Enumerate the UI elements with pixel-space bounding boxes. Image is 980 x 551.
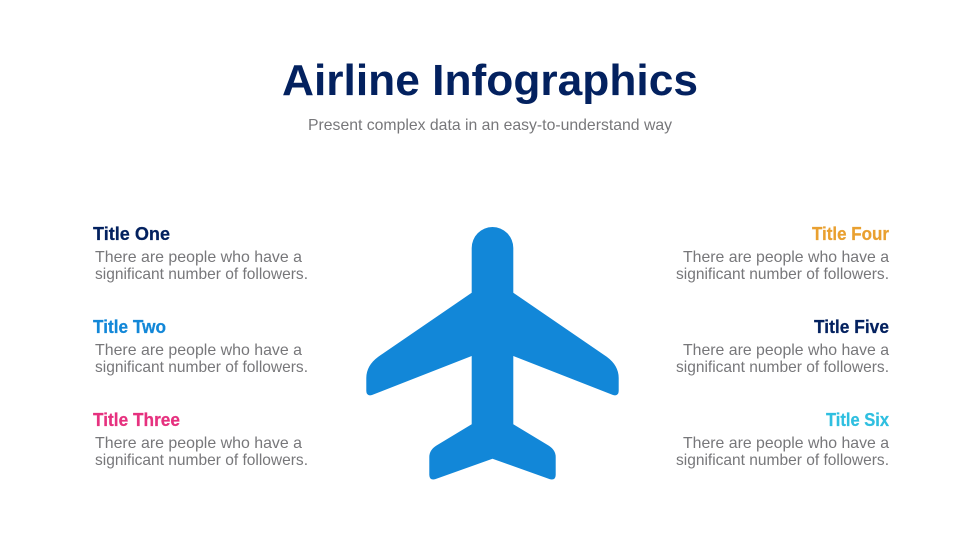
heading: title four: Title Four [812, 224, 889, 244]
text block: title three: significant number of followers. [95, 452, 308, 469]
panel: title two [93, 317, 308, 376]
text block: title two: There are people who have a [95, 342, 302, 359]
subtitle: Present complex data in an easy-to-understand way [308, 117, 672, 134]
title: Airline Infographics [282, 56, 698, 105]
panel: title one [93, 224, 308, 283]
text block: title six: There are people who have a [683, 435, 889, 452]
text block: title three [95, 435, 308, 469]
text block: title one: There are people who have a [95, 249, 302, 266]
panel: title four [676, 224, 889, 283]
heading: title five: Title Five [814, 317, 889, 337]
panel: title six [676, 410, 889, 469]
text block: title three: There are people who have a [95, 435, 302, 452]
panel: title three [93, 410, 308, 469]
heading: title six: Title Six [826, 410, 889, 430]
heading: title two: Title Two [93, 317, 166, 337]
heading: title three: Title Three [93, 410, 180, 430]
text block: title four [676, 249, 889, 283]
text block: title six [676, 435, 889, 469]
text block: title two: significant number of followers. [95, 359, 308, 376]
heading: title one: Title One [93, 224, 170, 244]
text block: title five: There are people who have a [683, 342, 889, 359]
text block: title four: significant number of followers. [676, 266, 889, 283]
panel: title five [676, 317, 889, 376]
text block: title five: significant number of followers. [676, 359, 889, 376]
text block: title five [676, 342, 889, 376]
text block: title one: significant number of followers. [95, 266, 308, 283]
text block: title one [95, 249, 308, 283]
text block: title four: There are people who have a [683, 249, 889, 266]
text block: title six: significant number of followers. [676, 452, 889, 469]
icon: airplane [366, 227, 619, 480]
text block: title two [95, 342, 308, 376]
